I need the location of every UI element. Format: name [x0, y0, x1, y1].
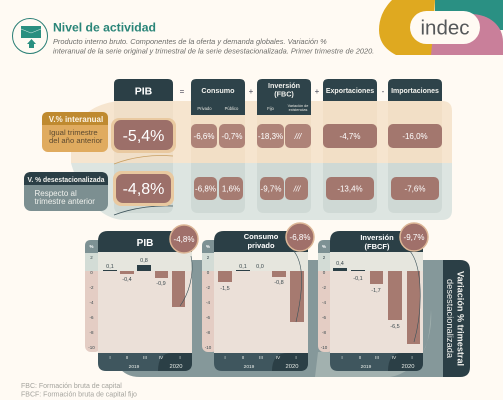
chart: Inversión FBCF: -8: [322, 330, 326, 335]
values: desestacionalizada row: -7,6%: [405, 184, 425, 194]
panel: quarterly chart backdrop: [118, 260, 443, 377]
chart: PIB: 2: [90, 255, 93, 260]
values: interanual row: -4,7%: [340, 132, 360, 141]
column header: Consumo: Público: [225, 106, 239, 111]
chart: Consumo privado: 0,0: [256, 264, 264, 270]
chart: Consumo privado: III: [259, 355, 263, 361]
column header: Inversión: existencias: [289, 108, 307, 112]
value: PIB desestacionalizado: [113, 171, 174, 206]
chart: PIB: -0,9: [156, 281, 166, 287]
footnotes: FBC: Formación bruta de capital: [21, 383, 122, 390]
chart: PIB: -10: [88, 345, 95, 350]
chart: PIB: 2019: [129, 364, 140, 370]
chart: PIB: 0,8: [140, 258, 148, 264]
column header: Inversión: Variación de: [288, 104, 308, 108]
label: V.% desestacionalizada: Respecto al: [34, 189, 77, 198]
label: V.% interanual: V.% interanual: [49, 115, 103, 124]
chart: Consumo privado: 0: [207, 270, 210, 275]
values: interanual row: -6,6%: [194, 132, 214, 141]
values: desestacionalizada row: -13,4%: [337, 184, 363, 194]
chart: Inversión FBCF: -10: [321, 345, 328, 350]
chart: PIB: 0: [90, 270, 93, 275]
values: interanual row: ///: [294, 132, 302, 141]
subtitle: interanual de la serie original y trimestral de la serie desestacionalizada. Primer trimestre de 2020.: [53, 46, 374, 56]
chart: Consumo privado: 2: [207, 255, 210, 260]
column header: PIB: PIB: [135, 86, 153, 98]
chart: Inversión FBCF: 0,4: [336, 261, 344, 267]
chart: PIB: [85, 225, 198, 371]
value: PIB desestacionalizado: -4,8%: [123, 181, 164, 198]
footnotes: [21, 383, 137, 398]
chart: Consumo privado: I: [295, 355, 297, 361]
chart: Inversión FBCF: -0,1: [353, 276, 363, 282]
chart: Consumo privado: -8: [206, 330, 210, 335]
column header: Inversión: Fijo: [267, 106, 275, 111]
chart: Consumo privado: -10: [205, 345, 212, 350]
column header: Inversión: [257, 79, 311, 115]
label: V.% desestacionalizada: [24, 172, 108, 211]
label: V.% interanual: Igual trimestre: [49, 128, 98, 137]
chart: Inversión FBCF: -1,7: [371, 288, 381, 294]
chart: Inversión FBCF: 0: [323, 270, 326, 275]
chart: Consumo privado: IV: [276, 355, 281, 361]
column header: Consumo: [191, 79, 245, 115]
values: interanual row: [191, 124, 442, 148]
chart: Inversión FBCF: %: [322, 244, 326, 249]
operators: =: [180, 87, 185, 96]
chart: PIB: IV: [159, 355, 164, 361]
chart: Inversión FBCF: I: [411, 355, 413, 361]
chart: Consumo privado: II: [242, 355, 244, 361]
chart: Inversión FBCF: -6,5: [390, 324, 400, 330]
chart: Consumo privado: -4: [206, 300, 210, 305]
value: PIB interanual: -5,4%: [123, 128, 164, 145]
operators: [180, 87, 385, 96]
chart: PIB: -6: [89, 315, 94, 320]
values: desestacionalizada row: -9,7%: [261, 184, 281, 194]
chart: Consumo privado: -0,8: [274, 280, 284, 286]
label: V.% desestacionalizada: V. % desestacionalizada: [28, 177, 105, 184]
values: desestacionalizada row: 1,6%: [222, 184, 240, 194]
chart: Inversión FBCF: -9,7%: [404, 233, 424, 242]
chart: PIB: II: [126, 355, 128, 361]
chart: Inversión FBCF: 2: [323, 255, 326, 260]
chart: Consumo privado: 2020: [286, 364, 298, 370]
chart: Consumo privado: 0,1: [239, 264, 247, 270]
chart: Inversión FBCF: 2020: [402, 364, 414, 370]
chart: PIB: PIB: [137, 238, 153, 249]
column header: Exportaciones: [323, 79, 377, 101]
chart: Inversión FBCF: -6: [322, 315, 326, 320]
column header: Consumo: Consumo: [201, 86, 235, 95]
values: desestacionalizada row: ///: [293, 184, 301, 194]
column header: Importaciones: Importaciones: [391, 88, 439, 95]
chart: PIB: -2: [89, 285, 94, 290]
values: desestacionalizada row: -6,8%: [195, 184, 216, 194]
chart: Consumo privado: %: [206, 244, 210, 249]
values: interanual row: -18,3%: [258, 132, 283, 141]
chart: Consumo privado: privado: [247, 241, 275, 250]
chart: Inversión FBCF: II: [359, 355, 361, 361]
operators: +: [249, 87, 254, 96]
column header: Inversión: Inversión: [268, 81, 300, 90]
chart: Inversión FBCF: [318, 223, 428, 371]
chart: PIB: 2020: [170, 364, 182, 370]
chart: Consumo privado: [202, 223, 314, 371]
label: V.% interanual: del año anterior: [49, 136, 103, 145]
values: interanual row: -16,0%: [402, 132, 428, 141]
chart: Consumo privado: -2: [206, 285, 210, 290]
chart: Inversión FBCF: Inversión: [360, 233, 394, 242]
column header: Exportaciones: Exportaciones: [326, 88, 374, 95]
chart: PIB: %: [89, 244, 94, 249]
chart: PIB: III: [143, 355, 147, 361]
logo: indec: [379, 0, 503, 55]
side tab: Variación % trimestral desestacionalizada: desestacionalizada: [445, 279, 455, 359]
chart: PIB: -4,8%: [174, 235, 194, 244]
column header: Importaciones: [388, 79, 442, 101]
operators: +: [315, 87, 320, 96]
chart: Inversión FBCF: IV: [392, 355, 397, 361]
label: V.% interanual: [42, 112, 108, 152]
column header: Inversión: (FBC): [274, 90, 294, 98]
chart: Inversión FBCF: I: [341, 355, 343, 361]
column header: PIB: [114, 79, 173, 101]
chart: Inversión FBCF: 2019: [361, 364, 372, 370]
values: desestacionalizada row: [194, 177, 439, 200]
subtitle: [53, 37, 374, 56]
icon: activity envelope with arrow: [12, 18, 48, 54]
column header: Consumo: Privado: [197, 106, 212, 111]
chart: Consumo privado: -1,5: [220, 286, 230, 292]
chart: Inversión FBCF: -2: [322, 285, 326, 290]
side tab: Variación % trimestral desestacionalizada: Variación % trimestral: [456, 271, 466, 366]
chart: Consumo privado: -6,8%: [290, 233, 310, 242]
subtitle: Producto interno bruto. Componentes de la oferta y demanda globales. Variación %: [53, 37, 327, 46]
label: V.% desestacionalizada: trimestre anterior: [34, 197, 95, 206]
title: Nivel de actividad: [53, 20, 156, 34]
value: PIB interanual: [111, 118, 176, 153]
operators: -: [382, 87, 385, 96]
chart: Consumo privado: I: [224, 355, 226, 361]
chart: PIB: -4: [89, 300, 94, 305]
chart: Inversión FBCF: III: [375, 355, 379, 361]
chart: PIB: -0,4: [122, 277, 132, 283]
chart: Consumo privado: 2019: [244, 364, 255, 370]
chart: PIB: I: [109, 355, 111, 361]
chart: PIB: I: [179, 355, 181, 361]
chart: Consumo privado: Consumo: [244, 232, 279, 241]
chart: Inversión FBCF: (FBCF): [364, 242, 390, 251]
chart: Inversión FBCF: -4: [322, 300, 326, 305]
chart: PIB: -8: [89, 330, 94, 335]
panel: comparison table background: [71, 101, 452, 220]
values: interanual row: -0,7%: [222, 132, 242, 141]
logo: indec: indec: [420, 16, 470, 40]
footnotes: FBCF: Formación bruta de capital fijo: [21, 392, 137, 398]
side tab: Variación % trimestral desestacionalizada: [443, 260, 470, 377]
chart: Consumo privado: -6: [206, 315, 210, 320]
chart: PIB: 0,1: [106, 264, 114, 270]
